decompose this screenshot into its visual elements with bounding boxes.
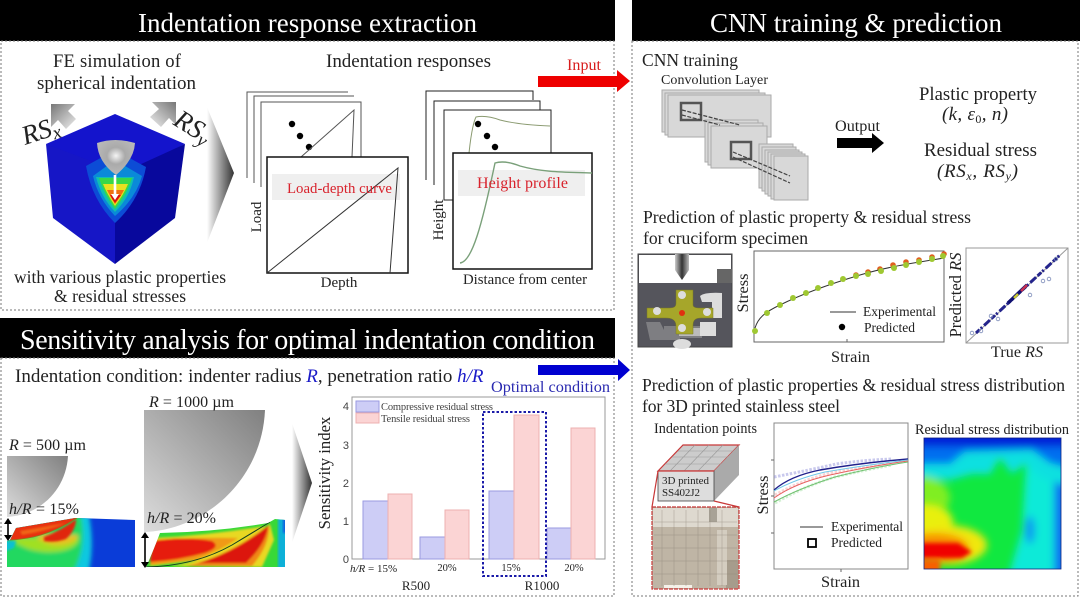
- predicted markers: [774, 459, 892, 503]
- chevron arrow: [292, 423, 312, 543]
- chart: cruciform stress-strain: Experimental: [863, 304, 936, 319]
- chart: 3D printed stress-strain: Predicted: [831, 535, 882, 550]
- x labels: R500: [402, 578, 430, 593]
- legend: Tensile residual stress: [381, 414, 470, 425]
- chart: 3D printed stress-strain: Strain: [821, 572, 860, 591]
- header: CNN training and prediction: CNN training & prediction: [710, 8, 1002, 38]
- output parameters: , RS: [972, 161, 1006, 182]
- simulation conditions caption: [14, 267, 226, 306]
- input arrow: Input: [567, 57, 602, 74]
- indentation condition text: Indentation condition: indenter radius R, penetration ratio h/R: [15, 366, 484, 387]
- icon: residual stress direction arrows: [17, 102, 218, 154]
- chart: height profile: [426, 91, 592, 288]
- CNN training heading: CNN training: [642, 50, 738, 70]
- output parameters: 0: [975, 112, 981, 126]
- chart: residual stress distribution heatmap: [915, 424, 1069, 570]
- experimental curve: [755, 258, 944, 328]
- cruciform heading: for cruciform specimen: [643, 228, 808, 248]
- x labels: [350, 563, 584, 593]
- illustration: 3D printed specimen: SS402J2: [662, 487, 700, 499]
- simulation conditions caption: with various plastic properties: [14, 267, 226, 287]
- diagram: convolution layers: [661, 73, 808, 200]
- FE cube with stress contour: [46, 114, 185, 264]
- output parameters: y: [1005, 169, 1012, 183]
- chart: height profile: Height profile: [477, 175, 568, 192]
- header: sensitivity analysis: Sensitivity analysis for optimal indentation condition: [20, 325, 595, 356]
- illustration: R500 indenter: R = 500 µm: [8, 437, 87, 454]
- chart: load-depth curve: Load: [249, 201, 265, 232]
- y axis: 2: [343, 478, 349, 490]
- panel: indentation response extraction: [1, 41, 630, 310]
- panel: CNN training and prediction: [632, 41, 1079, 596]
- chevron arrow: [207, 107, 234, 243]
- contour: R1000 stress field: [146, 519, 285, 567]
- FE simulation caption: FE simulation of: [53, 51, 182, 72]
- chart: cruciform stress-strain: Stress: [733, 274, 752, 312]
- stack ellipsis dots: [475, 121, 498, 150]
- output parameters: Plastic property: [919, 84, 1038, 105]
- y axis: [343, 401, 349, 566]
- predicted markers front: [752, 253, 946, 334]
- illustration: cruciform specimen: [638, 254, 732, 349]
- contour: R500 stress field: [7, 518, 135, 567]
- FE simulation caption: [37, 51, 196, 94]
- chart: predicted vs true residual stress: [946, 248, 1068, 361]
- chart: 3D printed stress-strain: [753, 423, 908, 591]
- output parameters: ): [1011, 161, 1018, 182]
- output parameters: Residual stress: [924, 140, 1037, 161]
- header: indentation response extraction: Indentation response extraction: [138, 8, 478, 38]
- chart: cruciform stress-strain: Predicted: [864, 320, 915, 335]
- chart: cruciform stress-strain: Strain: [831, 347, 870, 366]
- optimal condition arrow: Optimal condition: [491, 377, 610, 396]
- input arrow: [538, 57, 630, 92]
- illustration: R500 indenter: [7, 437, 87, 517]
- cruciform heading: Prediction of plastic property & residual stress: [643, 207, 971, 227]
- output parameters: , n): [982, 104, 1008, 125]
- x labels: 15%: [501, 563, 521, 574]
- y axis: 3: [343, 440, 349, 452]
- FE simulation caption: spherical indentation: [37, 73, 196, 94]
- optimal condition arrow: [491, 359, 630, 396]
- illustration: 3D printed specimen: [652, 421, 757, 589]
- chart: sensitivity index bars: [315, 397, 605, 593]
- illustration: 3D printed specimen: Indentation points: [654, 421, 757, 437]
- chart: cruciform stress-strain: [733, 251, 947, 366]
- predicted markers behind: [853, 251, 947, 278]
- output parameters: (RS: [937, 161, 966, 182]
- chart: load-depth curve: [247, 92, 408, 291]
- 3D printed heading: for 3D printed stainless steel: [642, 396, 840, 416]
- output parameters: x: [965, 169, 972, 183]
- icon: residual stress direction arrows: y: [191, 129, 211, 152]
- header: CNN training and prediction: [632, 0, 1080, 41]
- legend: Compressive residual stress: [381, 402, 493, 413]
- illustration: R1000 indenter: R = 1000 µm: [148, 394, 235, 411]
- experimental curves: [774, 459, 908, 502]
- stacked back frames: [247, 92, 361, 187]
- 3D printed heading: Prediction of plastic properties & residual stress distribution: [642, 375, 1065, 395]
- chart: load-depth curve: Depth: [321, 275, 358, 291]
- chart: predicted vs true residual stress: Predicted RS: [946, 253, 965, 337]
- diagram: convolution layers: Convolution Layer: [661, 73, 768, 88]
- optimal condition highlight: [483, 412, 546, 576]
- chart: predicted vs true residual stress: True RS: [991, 344, 1043, 361]
- x labels: h/R = 15%: [350, 563, 397, 575]
- label: h/R 20% with depth arrow: h/R = 20%: [147, 510, 216, 527]
- chart: height profile: Height: [431, 199, 447, 240]
- output arrow: Output: [835, 117, 880, 135]
- x labels: R1000: [525, 578, 559, 593]
- stacked back frames: [426, 91, 551, 200]
- icon: residual stress direction arrows: x: [49, 122, 65, 145]
- chart: 3D printed stress-strain: Stress: [753, 476, 772, 514]
- header: indentation response extraction: [0, 0, 615, 41]
- output arrow: [835, 117, 884, 153]
- stack ellipsis dots: [289, 121, 312, 150]
- chart: load-depth curve: Load-depth curve: [287, 181, 392, 197]
- tensile bars: [388, 415, 595, 559]
- label: h/R 15% with depth arrow: [4, 501, 79, 541]
- legend: [356, 401, 493, 425]
- y axis: 1: [343, 516, 349, 528]
- simulation conditions caption: & residual stresses: [54, 286, 186, 306]
- chart: height profile: Distance from center: [463, 272, 587, 288]
- label: h/R 20% with depth arrow: [141, 510, 216, 568]
- 3D printed heading: [642, 375, 1065, 416]
- illustration: R1000 indenter: [144, 394, 265, 532]
- output parameters: [919, 84, 1038, 183]
- chart: residual stress distribution heatmap: Residual stress distribution: [915, 422, 1069, 438]
- cruciform heading: [643, 207, 971, 248]
- x labels: 20%: [437, 563, 457, 574]
- output parameters: (k, ε: [942, 104, 975, 125]
- chart: 3D printed stress-strain: Experimental: [831, 519, 903, 534]
- x labels: 20%: [564, 563, 584, 574]
- compressive bars: [363, 491, 571, 559]
- label: h/R 15% with depth arrow: h/R = 15%: [9, 501, 79, 518]
- icon: residual stress direction arrows: RS: [169, 104, 210, 145]
- y axis: 0: [343, 554, 349, 566]
- icon: residual stress direction arrows: RS: [18, 113, 55, 151]
- illustration: 3D printed specimen: 3D printed: [662, 475, 710, 487]
- responses heading: Indentation responses: [326, 51, 491, 72]
- panel: sensitivity analysis: [0, 358, 630, 596]
- y axis: 4: [343, 401, 349, 413]
- specimen photo: [652, 507, 739, 589]
- chart: sensitivity index bars: Sensitivity index: [315, 416, 334, 529]
